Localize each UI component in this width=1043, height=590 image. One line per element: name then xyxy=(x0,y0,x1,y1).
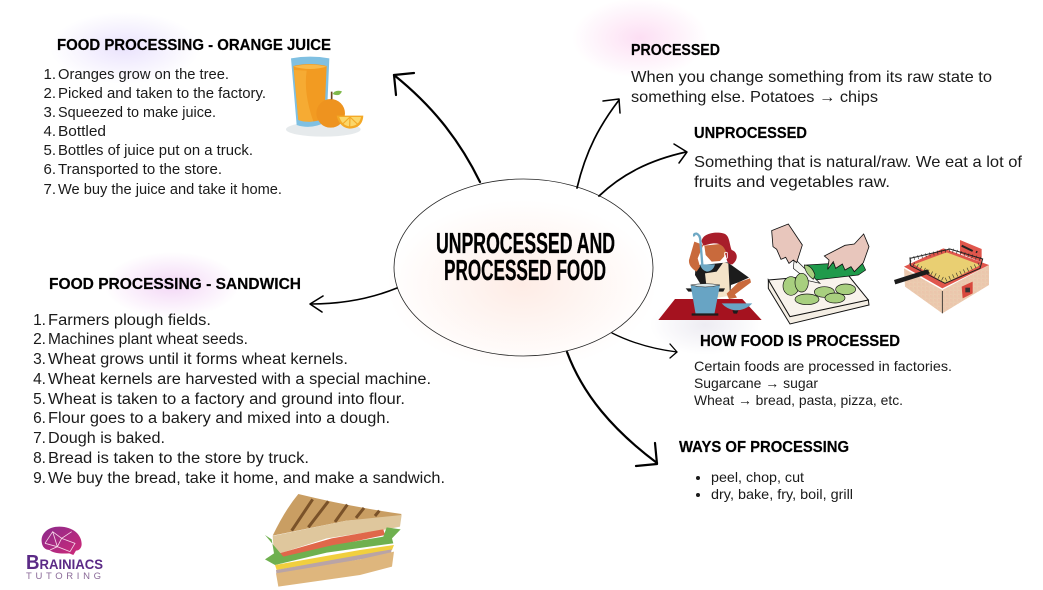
text: processed definition: When you change something from its raw state to xyxy=(631,69,992,86)
text: processed definition: something else. Potatoes → chips xyxy=(631,89,878,106)
heading: how food is processed: HOW FOOD IS PROCESSED xyxy=(700,333,900,350)
heading: processed: PROCESSED xyxy=(631,42,720,59)
illustration: cook stirring a pot xyxy=(658,233,762,320)
list: sandwich steps: 4. xyxy=(33,371,46,388)
list: sandwich steps: 2. xyxy=(33,331,46,348)
list: sandwich steps: Wheat kernels are harvested with a special machine. xyxy=(48,371,431,388)
arrow: to orange juice xyxy=(394,73,480,182)
list: sandwich steps: 1. xyxy=(33,312,46,329)
icon: sandwich xyxy=(265,494,402,587)
arrow: to how food is processed xyxy=(612,333,677,358)
list: ways of processing xyxy=(696,469,853,502)
text: how food is processed: Certain foods are processed in factories. xyxy=(694,358,952,374)
list: sandwich steps: 6. xyxy=(33,410,46,427)
list: orange juice steps: 3. xyxy=(43,104,56,121)
list: ways of processing: peel, chop, cut xyxy=(711,469,804,485)
list: sandwich steps: Wheat is taken to a factory and ground into flour. xyxy=(48,391,405,408)
panel: food processing sandwich xyxy=(33,276,445,587)
list: orange juice steps: Squeezed to make juice. xyxy=(58,104,216,121)
heading: sandwich: FOOD PROCESSING - SANDWICH xyxy=(49,276,301,293)
list: sandwich steps: Dough is baked. xyxy=(48,430,165,447)
list: orange juice steps: Bottles of juice put on a truck. xyxy=(58,142,253,159)
arrow: to ways of processing xyxy=(567,352,657,466)
list: sandwich steps: 5. xyxy=(33,391,46,408)
text: processed definition xyxy=(631,69,992,106)
list: orange juice steps: We buy the juice and take it home. xyxy=(58,181,282,198)
list: sandwich steps: Flour goes to a bakery and mixed into a dough. xyxy=(48,410,390,427)
list: sandwich steps: 3. xyxy=(33,351,46,368)
panel: how food is processed xyxy=(694,333,952,408)
heading: orange juice: FOOD PROCESSING - ORANGE JUICE xyxy=(57,37,331,54)
list: sandwich steps: Machines plant wheat seeds. xyxy=(48,331,248,348)
central topic ellipse xyxy=(394,179,653,356)
list: orange juice steps: 7. xyxy=(43,181,56,198)
list: orange juice steps: Picked and taken to the factory. xyxy=(58,85,266,102)
list: orange juice steps: Oranges grow on the tree. xyxy=(58,66,229,83)
list: orange juice steps: 6. xyxy=(43,161,56,178)
heading: ways of processing: WAYS OF PROCESSING xyxy=(679,439,849,456)
logo: Brainiacs Tutoring xyxy=(26,527,103,582)
panel: food processing orange juice xyxy=(43,37,363,198)
list: orange juice steps xyxy=(43,66,282,198)
illustration: chopping cucumber xyxy=(768,224,869,324)
list: orange juice steps: 4. xyxy=(43,123,56,140)
title: PROCESSED FOOD xyxy=(444,255,606,287)
list: orange juice steps: 2. xyxy=(43,85,56,102)
icon: orange juice glass xyxy=(286,57,363,137)
list: orange juice steps: 5. xyxy=(43,142,56,159)
logo wordmark: BRAINIACS xyxy=(26,552,103,574)
text: unprocessed definition: Something that is natural/raw. We eat a lot of xyxy=(694,154,1023,171)
list: sandwich steps: 9. xyxy=(33,470,46,487)
text: how food is processed: Wheat → bread, pasta, pizza, etc. xyxy=(694,392,903,408)
list: orange juice steps: 1. xyxy=(43,66,56,83)
text: unprocessed definition: fruits and vegetables raw. xyxy=(694,174,890,191)
list: sandwich steps: 8. xyxy=(33,450,46,467)
arrow: to processed xyxy=(577,99,620,188)
list: sandwich steps: Wheat grows until it forms wheat kernels. xyxy=(48,351,348,368)
title xyxy=(436,228,615,287)
list: sandwich steps: Farmers plough fields. xyxy=(48,312,211,329)
text: unprocessed definition xyxy=(694,154,1023,191)
list: sandwich steps xyxy=(33,312,445,487)
list: sandwich steps: 7. xyxy=(33,430,46,447)
arrow: to unprocessed xyxy=(599,144,687,196)
list: orange juice steps: Transported to the store. xyxy=(58,161,222,178)
logo wordmark: TUTORING xyxy=(26,571,101,582)
list: sandwich steps: Bread is taken to the store by truck. xyxy=(48,450,309,467)
title: UNPROCESSED AND xyxy=(436,228,615,260)
illustration: deep fryer xyxy=(894,240,989,313)
panel: ways of processing xyxy=(679,439,853,502)
list: orange juice steps: Bottled xyxy=(58,123,106,140)
arrow: to sandwich xyxy=(310,288,397,312)
heading: unprocessed: UNPROCESSED xyxy=(694,125,807,142)
text: how food is processed xyxy=(694,358,952,408)
list: sandwich steps: We buy the bread, take it home, and make a sandwich. xyxy=(48,470,445,487)
list: ways of processing: dry, bake, fry, boil, grill xyxy=(711,486,853,502)
icon: brain xyxy=(42,527,82,555)
panel: unprocessed definition xyxy=(694,125,1023,191)
text: how food is processed: Sugarcane → sugar xyxy=(694,375,818,391)
panel: processed definition xyxy=(631,42,992,106)
